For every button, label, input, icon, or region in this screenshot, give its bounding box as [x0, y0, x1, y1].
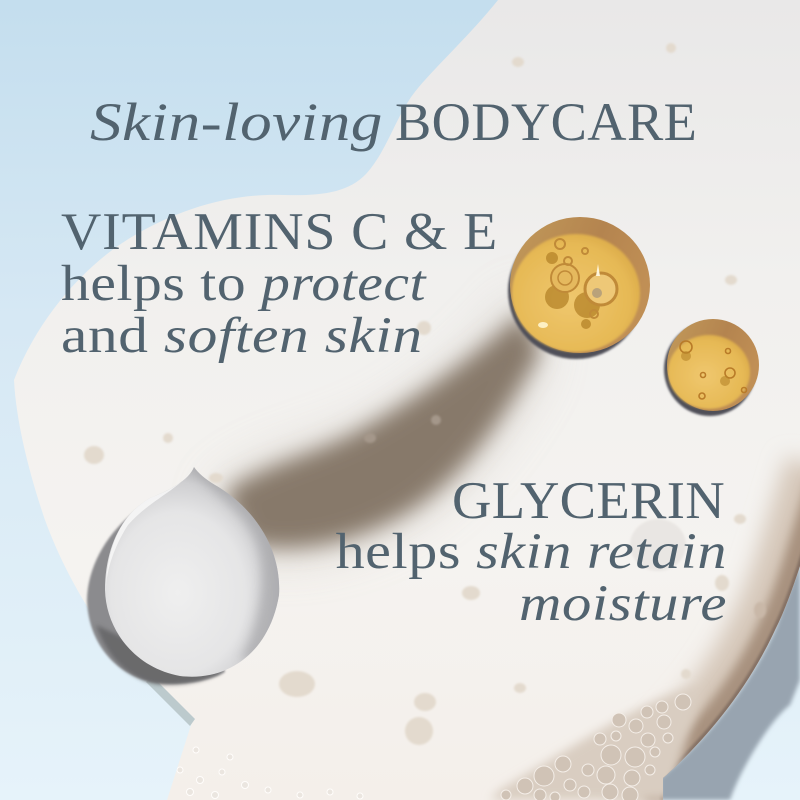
foam bubble bed — [490, 688, 700, 800]
shadow on background bottom right — [660, 560, 800, 800]
title: BODYCARE — [395, 92, 697, 152]
large foam bubbles — [84, 43, 766, 745]
text block: vitamins: VITAMINS C & E — [61, 203, 498, 261]
oil drop large — [508, 217, 650, 359]
oil bubbles small — [680, 341, 746, 399]
oil highlights — [538, 322, 548, 328]
text block: glycerin — [336, 471, 727, 631]
oil bubbles and their shadows — [545, 252, 600, 329]
text block: glycerin: GLYCERIN — [452, 471, 725, 530]
title — [90, 92, 697, 152]
text block: vitamins — [61, 203, 498, 363]
oil drop small — [664, 319, 759, 416]
foam bubbles cluster — [501, 694, 691, 800]
warm edge shade bottom right — [663, 470, 800, 800]
diagonal shadow fold across foam — [215, 290, 540, 555]
fine bubbles bottom left — [177, 747, 363, 799]
text block: vitamins: and soften skin — [61, 307, 423, 363]
text block: glycerin: moisture — [519, 575, 727, 631]
gel drop — [87, 465, 300, 726]
title: Skin-loving — [90, 92, 383, 152]
text block: vitamins: helps to protect — [61, 255, 428, 311]
text block: glycerin: helps skin retain — [336, 523, 727, 579]
